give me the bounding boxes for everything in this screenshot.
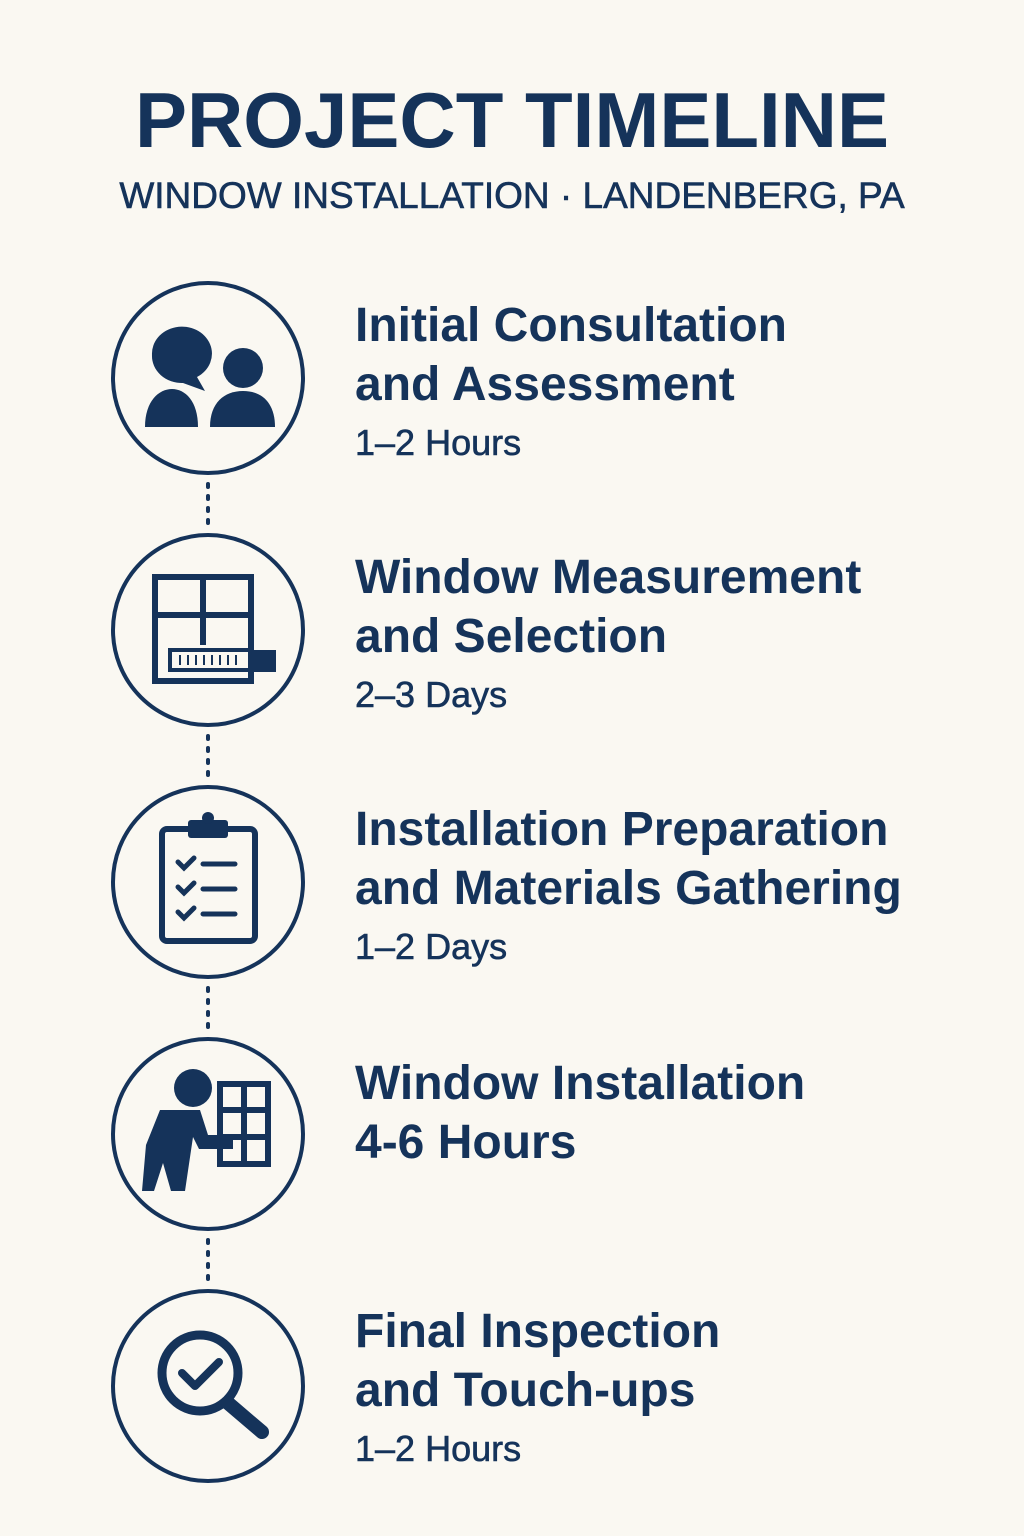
icon: magnifier: [113, 1291, 303, 1481]
step 5 text: and Touch-ups: [355, 1364, 695, 1417]
step 3 text: 1–2 Days: [355, 926, 507, 967]
icon: consultation: [113, 283, 303, 473]
dotted connectors: [206, 484, 210, 1280]
icon: clipboard: [113, 787, 303, 977]
title: PROJECT TIMELINE: [135, 76, 889, 164]
step 2 text: 2–3 Days: [355, 674, 507, 715]
step 1 text: Initial Consultation: [355, 299, 787, 352]
step 4 text: Window Installation: [355, 1057, 805, 1110]
subtitle: WINDOW INSTALLATION · LANDENBERG, PA: [119, 175, 905, 216]
step 4 text: 4-6 Hours: [355, 1116, 576, 1169]
icon: installer: [113, 1039, 303, 1229]
step 5 text: [355, 1305, 720, 1469]
step 3 text: Installation Preparation: [355, 803, 888, 856]
step 2 text: Window Measurement: [355, 551, 861, 604]
step 2 text: and Selection: [355, 610, 667, 663]
step 3 text: and Materials Gathering: [355, 862, 902, 915]
step 4 text: [355, 1057, 805, 1169]
step 5 text: 1–2 Hours: [355, 1428, 521, 1469]
step 1 text: [355, 299, 787, 463]
step 1 text: and Assessment: [355, 358, 735, 411]
step 2 text: [355, 551, 861, 715]
step 3 text: [355, 803, 902, 967]
icon: window measurement: [113, 535, 303, 725]
step 1 text: 1–2 Hours: [355, 422, 521, 463]
step 5 text: Final Inspection: [355, 1305, 720, 1358]
